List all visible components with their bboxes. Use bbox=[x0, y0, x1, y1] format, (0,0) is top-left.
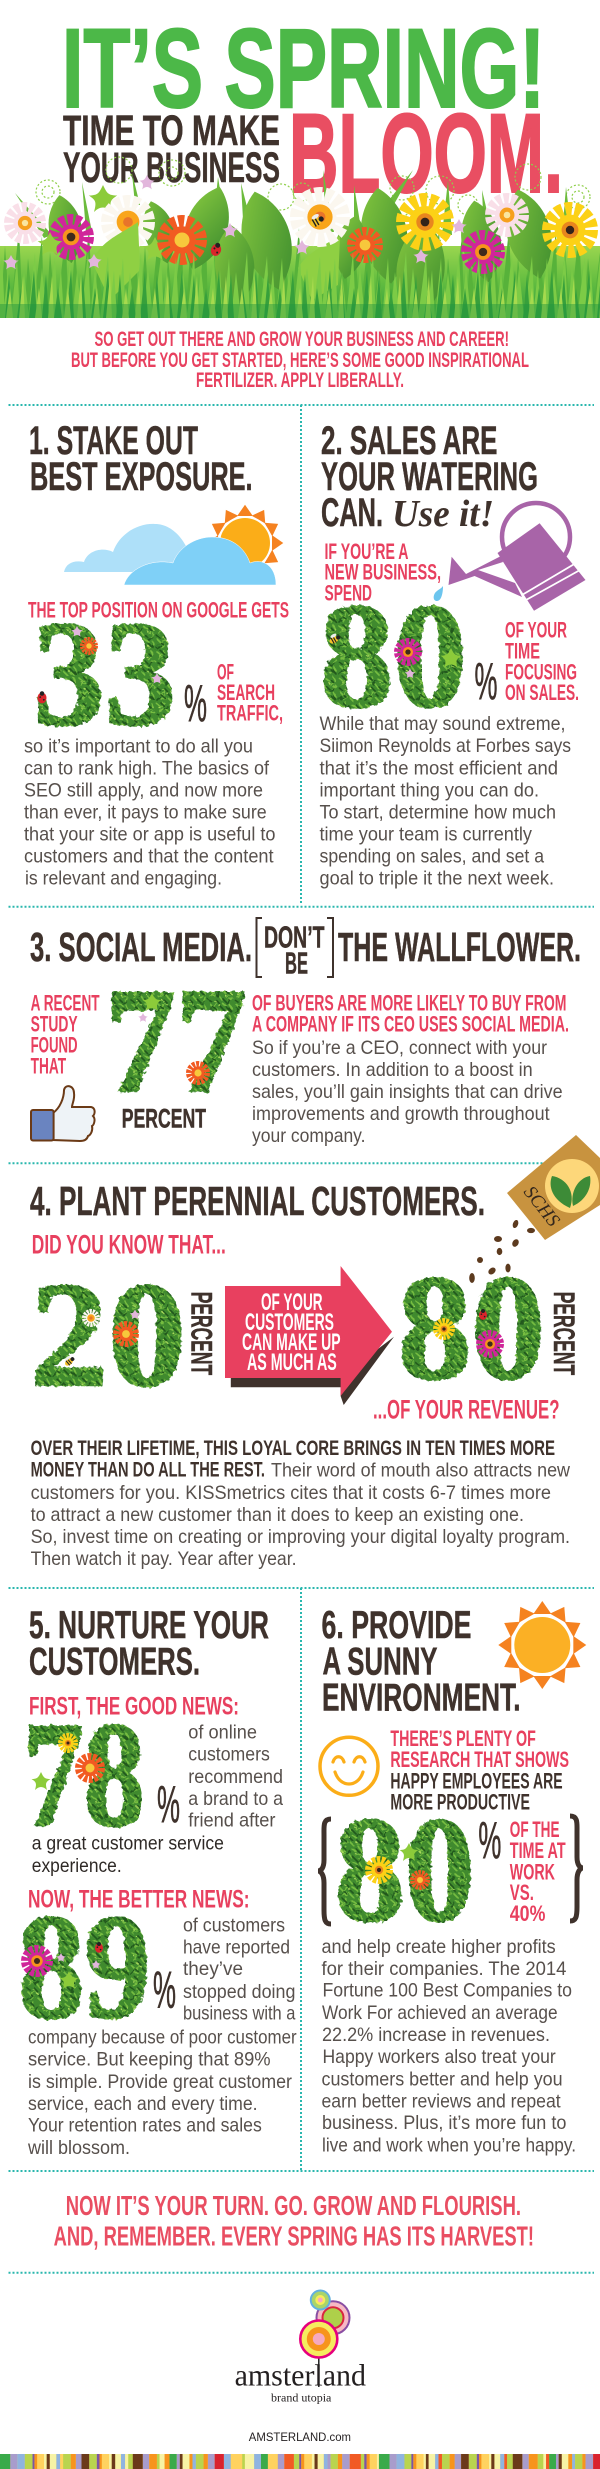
heading 5 bbox=[29, 1604, 269, 1684]
stat: 89 percent bbox=[18, 1884, 296, 2050]
stat: 78 percent: experience. bbox=[32, 1855, 122, 1877]
body text 6 bbox=[322, 1936, 576, 2156]
callout: a recent study found that bbox=[31, 991, 100, 1078]
icon: sun bbox=[498, 1601, 586, 1689]
body text 4: Then watch it pay. Year after year. bbox=[31, 1548, 297, 1570]
footer colour stripe bbox=[0, 2454, 600, 2469]
stat: 78 percent bbox=[23, 1692, 283, 1877]
stat: 80 percent: 80 bbox=[398, 1245, 545, 1411]
panel: 2 sales are your watering can bbox=[320, 419, 586, 890]
stat callout: 33 percent bbox=[28, 591, 289, 757]
body text 6: 22.2% increase in revenues. bbox=[322, 2024, 550, 2046]
arrow bbox=[225, 1266, 394, 1405]
body text 1: customers and that the content bbox=[24, 846, 274, 868]
text: buyers and CEOs: customers. In addition to a boost in bbox=[252, 1059, 533, 1081]
body text 5: service, each and every time. bbox=[28, 2093, 258, 2115]
stat: 89 percent: business with a bbox=[183, 2003, 296, 2025]
body text 5: is simple. Provide great customer bbox=[28, 2071, 292, 2093]
body text 2: spending on sales, and set a bbox=[320, 846, 544, 868]
icon: sun and clouds bbox=[64, 505, 283, 585]
body text 5: Your retention rates and sales bbox=[28, 2115, 262, 2137]
body text 1: that your site or app is useful to bbox=[24, 824, 276, 846]
arrow: OF YOUR bbox=[261, 1289, 323, 1316]
stat: 80 percent in braces: TIME AT bbox=[510, 1838, 566, 1863]
heading 1: BEST EXPOSURE. bbox=[30, 455, 253, 499]
stat: 80 percent in braces: WORK bbox=[510, 1859, 555, 1884]
text: buyers and CEOs: So if you’re a CEO, connect with your bbox=[252, 1037, 547, 1059]
icon: smiley bbox=[320, 1737, 378, 1795]
stat: 77 percent: PERCENT bbox=[122, 1104, 206, 1134]
text: buyers and CEOs: your company. bbox=[252, 1125, 366, 1147]
stat: 80 percent in braces: 40% bbox=[510, 1901, 545, 1926]
body text 5 bbox=[27, 2026, 297, 2159]
text: research on happy employees bbox=[390, 1726, 569, 1815]
subtitle: time to make your business bbox=[63, 107, 280, 192]
body text 4: So, invest time on creating or improving your digital loyalty program. bbox=[31, 1526, 570, 1548]
stat: 80 percent in braces: OF THE bbox=[510, 1817, 560, 1842]
heading 1: 1. STAKE OUT bbox=[29, 419, 198, 463]
callout: a recent study found that: A RECENT bbox=[31, 991, 100, 1016]
logo: amsterland brand utopia: amsterland bbox=[235, 2358, 366, 2393]
heading 3: DON’T bbox=[264, 919, 325, 954]
stat: 89 percent: of customers bbox=[183, 1914, 285, 1936]
body text 1 bbox=[24, 736, 276, 890]
stat callout: 33 percent: % bbox=[184, 675, 207, 733]
stat: 89 percent: % bbox=[153, 1962, 176, 2020]
body text 5: company because of poor customer bbox=[28, 2026, 297, 2048]
stat: 77 percent: 77 bbox=[105, 958, 247, 1124]
arrow: AS MUCH AS bbox=[247, 1349, 337, 1376]
stat: 80 percent in braces bbox=[318, 1787, 583, 1953]
text: buyers and CEOs: improvements and growth throughout bbox=[252, 1103, 550, 1125]
website url: AMSTERLAND.com bbox=[249, 2430, 351, 2444]
closing message bbox=[54, 2190, 534, 2252]
stat: 78 percent: a great customer service bbox=[32, 1833, 224, 1855]
heading 1 bbox=[29, 419, 253, 499]
illustration: grass and flowers bbox=[0, 157, 600, 323]
body text 6: for their companies. The 2014 bbox=[322, 1958, 567, 1980]
stat: 78 percent: customers bbox=[188, 1744, 270, 1766]
panel: 3 social media bbox=[30, 918, 581, 1147]
stat callout: 80 percent: NEW BUSINESS, bbox=[324, 559, 441, 584]
subtitle: time to make your business: YOUR BUSINESS bbox=[63, 144, 280, 192]
stat: 20 percent: 20 bbox=[30, 1252, 186, 1418]
body text 4: Their word of mouth also attracts new bbox=[271, 1460, 571, 1482]
body text 2: goal to triple it the next week. bbox=[320, 868, 554, 890]
body text 2: While that may sound extreme, bbox=[320, 713, 566, 735]
body text 5: service. But keeping that 89% bbox=[28, 2049, 271, 2071]
intro text: FERTILIZER. APPLY LIBERALLY. bbox=[196, 369, 404, 392]
stat callout: 80 percent: % bbox=[474, 653, 498, 711]
stat: 20 percent: PERCENT bbox=[184, 1292, 218, 1375]
body text 5: will blossom. bbox=[27, 2137, 130, 2159]
stat callout: 80 percent bbox=[320, 539, 579, 739]
icon: seed packet bbox=[469, 1135, 600, 1283]
heading 3: BE bbox=[285, 945, 308, 980]
stat: 78 percent: friend after bbox=[188, 1810, 276, 1832]
panel: 6 provide a sunny environment bbox=[318, 1601, 586, 2156]
panel: 4 plant perennial customers bbox=[30, 1135, 600, 1570]
body text 6: Happy workers also treat your bbox=[322, 2046, 556, 2068]
stat: 89 percent: 89 bbox=[18, 1884, 150, 2050]
stat callout: 33 percent: 33 bbox=[33, 591, 176, 757]
icon: seed packet: SCHS bbox=[519, 1182, 564, 1231]
body text 6: Work For achieved an average bbox=[322, 2002, 558, 2024]
body text 2: important thing you can do. bbox=[320, 780, 539, 802]
body text 4: MONEY THAN DO ALL THE REST. bbox=[31, 1459, 265, 1482]
callout: a recent study found that: FOUND bbox=[31, 1033, 78, 1058]
heading 2: CAN. bbox=[321, 491, 383, 535]
body text 2: Siimon Reynolds at Forbes says bbox=[320, 735, 571, 757]
heading 3: 3. SOCIAL MEDIA. bbox=[30, 924, 252, 970]
body text 1: SEO still apply, and now more bbox=[24, 780, 263, 802]
icon: thumbs up bbox=[31, 1086, 95, 1141]
text: buyers and CEOs bbox=[252, 991, 569, 1147]
body text 1: so it’s important to do all you bbox=[24, 736, 253, 758]
text: buyers and CEOs: sales, you’ll gain insights that can drive bbox=[252, 1081, 563, 1103]
stat: 80 percent in braces: VS. bbox=[510, 1880, 534, 1905]
body text 4 bbox=[31, 1437, 571, 1570]
body text 1: can to rank high. The basics of bbox=[24, 758, 270, 780]
stat callout: 33 percent: SEARCH bbox=[217, 680, 275, 705]
panel: 5 nurture your customers bbox=[18, 1604, 297, 2159]
stat: 78 percent: recommend bbox=[188, 1766, 283, 1788]
arrow: CAN MAKE UP bbox=[242, 1329, 341, 1356]
stat callout: 33 percent: TRAFFIC, bbox=[217, 700, 283, 726]
stat: 80 percent in braces: % bbox=[478, 1812, 501, 1870]
heading 2 bbox=[321, 419, 538, 535]
body text 2: To start, determine how much bbox=[320, 802, 556, 824]
body text 2 bbox=[320, 713, 571, 890]
logo: amsterland brand utopia: brand utopia bbox=[271, 2391, 332, 2405]
stat callout: 33 percent: OF bbox=[217, 659, 234, 684]
body text 1: is relevant and engaging. bbox=[25, 868, 222, 890]
stat: 78 percent: a brand to a bbox=[188, 1788, 283, 1810]
stat: 78 percent: % bbox=[157, 1776, 180, 1834]
stat callout: 80 percent: TIME bbox=[505, 638, 540, 663]
heading 6: 6. PROVIDE bbox=[322, 1604, 472, 1647]
panel: 1 stake out best exposure bbox=[24, 419, 289, 890]
stat: 80 percent: PERCENT bbox=[547, 1292, 580, 1375]
stat: 89 percent: stopped doing bbox=[183, 1981, 295, 2003]
intro text bbox=[71, 328, 529, 392]
subtitle: time to make your business: TIME TO MAKE bbox=[63, 107, 280, 155]
callout: a recent study found that: THAT bbox=[31, 1053, 66, 1078]
body text 4: customers for you. KISSmetrics cites that it costs 6-7 times more bbox=[31, 1482, 551, 1504]
heading 6: A SUNNY bbox=[322, 1641, 438, 1684]
stat callout: 80 percent: 80 bbox=[320, 573, 467, 739]
heading 3 bbox=[30, 918, 581, 980]
stat: 89 percent: NOW, THE BETTER NEWS: bbox=[28, 1885, 250, 1913]
body text 6: business. Plus, it’s more fun to bbox=[322, 2112, 567, 2134]
callout: did you know: DID YOU KNOW THAT... bbox=[32, 1229, 226, 1259]
heading 5: 5. NURTURE YOUR bbox=[29, 1604, 269, 1647]
body text 2: time your team is currently bbox=[320, 824, 532, 846]
stat: 89 percent: they’ve bbox=[183, 1958, 243, 1980]
icon: water drop bbox=[434, 586, 443, 601]
body text 4: to attract a new customer than it does to keep an existing one. bbox=[31, 1504, 524, 1526]
arrow: CUSTOMERS bbox=[245, 1309, 334, 1336]
body text 6: earn better reviews and repeat bbox=[322, 2090, 561, 2112]
body text 6: and help create higher profits bbox=[322, 1936, 556, 1958]
heading 6 bbox=[322, 1604, 520, 1720]
stat: 89 percent: have reported bbox=[183, 1937, 290, 1959]
stat callout: 33 percent: THE TOP POSITION ON GOOGLE GETS bbox=[28, 598, 289, 623]
stat: 80 percent in braces: 80 bbox=[335, 1787, 474, 1953]
callout: a recent study found that: STUDY bbox=[31, 1012, 78, 1037]
stat: 78 percent: of online bbox=[188, 1721, 257, 1743]
stat: 78 percent: 78 bbox=[23, 1692, 145, 1858]
stat callout: 80 percent: SPEND bbox=[324, 581, 372, 606]
heading 5: CUSTOMERS. bbox=[29, 1641, 200, 1684]
body text 6: Fortune 100 Best Companies to bbox=[322, 1980, 572, 2002]
heading 2: Use it! bbox=[392, 493, 494, 535]
body text 1: than ever, it pays to make sure bbox=[24, 802, 267, 824]
stat: 78 percent: FIRST, THE GOOD NEWS: bbox=[29, 1692, 239, 1720]
body text 2: that it’s the most efficient and bbox=[320, 758, 558, 780]
body text 6: customers better and help you bbox=[322, 2068, 563, 2090]
icon: watering can bbox=[448, 503, 586, 611]
stat callout: 80 percent: IF YOU’RE A bbox=[324, 539, 409, 564]
heading 2: 2. SALES ARE bbox=[321, 419, 498, 463]
logo: amsterland brand utopia bbox=[235, 2290, 366, 2405]
